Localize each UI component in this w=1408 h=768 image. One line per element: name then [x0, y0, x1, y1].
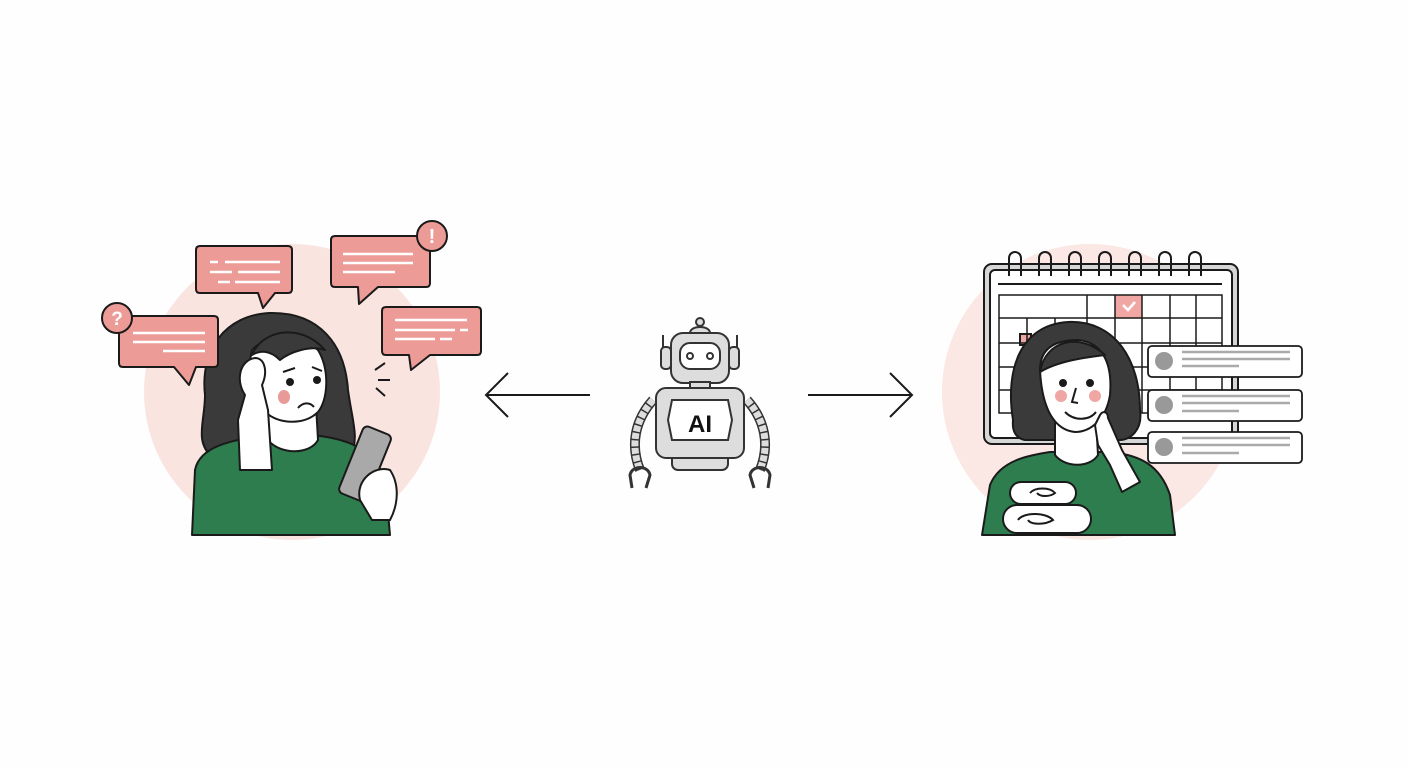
- arrow right: [808, 373, 912, 417]
- robot AI: [630, 318, 770, 488]
- speech bubble 1: [196, 246, 292, 308]
- background circle left: [144, 244, 440, 540]
- speech bubble 4: [382, 307, 481, 370]
- scene: organized woman: [942, 244, 1302, 540]
- calendar: [984, 252, 1238, 444]
- speech bubble 2 with alert: [331, 221, 447, 304]
- robot AI: AI: [688, 411, 712, 438]
- phone: [338, 425, 397, 520]
- woman body left: [192, 313, 390, 535]
- tip cards: [1148, 346, 1302, 463]
- speech bubble 3 with question: ?: [111, 309, 123, 330]
- woman body right: [982, 322, 1175, 535]
- arrow left: [486, 373, 590, 417]
- speech bubble 2 with alert: !: [429, 226, 435, 248]
- face details right: [1018, 380, 1096, 524]
- face details left: [283, 363, 390, 408]
- speech bubble 3 with question: [102, 303, 218, 385]
- background circle right: [942, 244, 1238, 540]
- scene: stressed woman: [102, 221, 481, 540]
